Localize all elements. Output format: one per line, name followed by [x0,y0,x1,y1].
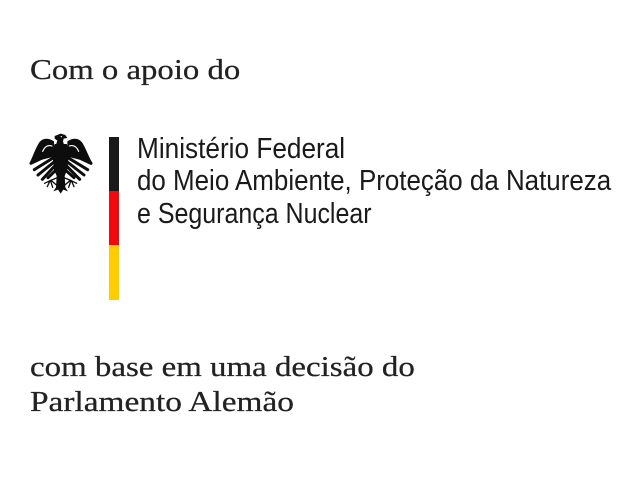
ministry name: e Segurança Nuclear [137,198,372,230]
heading: with the support of: Com o apoio do [30,54,240,86]
ministry name [137,132,612,230]
German flag stripe [109,137,119,300]
ministry name: do Meio Ambiente, Proteção da Natureza [137,165,611,197]
icon: federal eagle [29,134,93,194]
text: based on a decision of the German Parliament [30,351,415,418]
text: based on a decision of the German Parliament: Parlamento Alemão [30,386,294,418]
text: based on a decision of the German Parliament: com base em uma decisão do [30,351,415,383]
ministry name: Ministério Federal [137,132,345,164]
